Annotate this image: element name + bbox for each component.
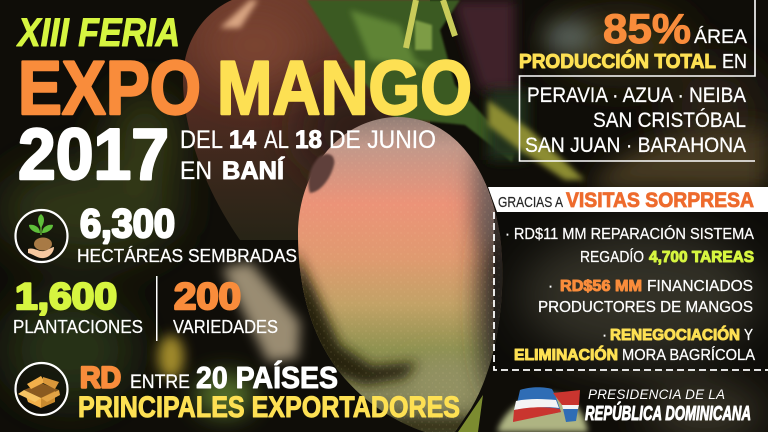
- stat: 200 varieties: VARIEDADES: [173, 317, 278, 337]
- exporter ranking text: 20 PAÍSES: [196, 360, 338, 395]
- exporter ranking text: PRINCIPALES EXPORTADORES: [78, 391, 460, 424]
- panel heading bar: GRACIAS A: [498, 195, 563, 211]
- icon: plant in hand: [16, 210, 68, 262]
- provinces box: [520, 0, 755, 161]
- year: 2017: 2017: [18, 115, 169, 195]
- leaf stems: [406, 0, 416, 48]
- item: irrigation repair: [505, 226, 755, 266]
- dates and location: DEL: [180, 126, 223, 154]
- item: renegotiation: ·: [602, 327, 607, 344]
- item: renegotiation: ELIMINACIÓN: [514, 346, 618, 364]
- panel heading bar: VISITAS SORPRESA: [566, 189, 754, 212]
- stat: 1,600 plantations: [13, 276, 143, 337]
- dark red mango, upper right: [452, 0, 515, 95]
- item: financing: ·: [548, 278, 553, 295]
- exporter ranking text: [78, 360, 460, 424]
- stat: 6,300 hectares: 6,300: [80, 202, 175, 246]
- upper red mango: [180, 0, 440, 240]
- panel heading bar: [488, 187, 768, 212]
- stat: 85% production area: EN: [722, 51, 747, 73]
- item: financing: FINANCIADOS: [647, 278, 753, 295]
- stat: 6,300 hectares: [77, 202, 297, 266]
- item: financing: [538, 278, 753, 316]
- leaf: [307, 0, 515, 162]
- stat: 85% production area: PRODUCCIÓN TOTAL: [519, 49, 716, 73]
- title: Expo Mango: [18, 46, 472, 131]
- dates and location: 14: [229, 126, 256, 154]
- main mango: [298, 117, 502, 432]
- dates and location: DE JUNIO: [329, 126, 436, 154]
- panel: surprise visits: [488, 187, 768, 370]
- icon: Dominican flag: [513, 387, 580, 422]
- stat: 6,300 hectares: HECTÁREAS SEMBRADAS: [77, 246, 297, 266]
- dates and location: EN: [180, 157, 212, 185]
- provinces box: SAN CRISTÓBAL: [593, 109, 746, 132]
- item: financing: PRODUCTORES DE MANGOS: [538, 299, 753, 316]
- item: renegotiation: RENEGOCIACIÓN: [610, 326, 740, 344]
- right blurred scene: [458, 21, 768, 432]
- stat: 85% production area: ÁREA: [694, 25, 747, 48]
- stat: 1,600 plantations: PLANTACIONES: [13, 317, 143, 337]
- logo: Presidencia de la República Dominicana: PRESIDENCIA DE LA: [588, 387, 725, 402]
- item: renegotiation: Y: [744, 327, 753, 344]
- exporter ranking text: RD: [80, 362, 121, 394]
- item: irrigation repair: 4,700 TAREAS: [649, 249, 754, 266]
- stat: 1,600 plantations: 1,600: [15, 276, 117, 317]
- provinces box: SAN JUAN · BARAHONA: [525, 134, 746, 157]
- title: Expo Mango: EXPO: [18, 46, 201, 131]
- title: XIII Feria: XIII FERIA: [16, 11, 180, 55]
- item: renegotiation: MORA BAGRÍCOLA: [622, 347, 756, 364]
- dates and location: BANÍ: [222, 156, 285, 185]
- icon: cardboard box: [16, 363, 68, 415]
- item: irrigation repair: · RD$11 MM REPARACIÓN SISTEMA: [505, 226, 755, 243]
- item: irrigation repair: REGADÍO: [580, 249, 644, 266]
- dates and location: [180, 126, 436, 185]
- stat: 85% production area: [519, 5, 747, 73]
- logo: Presidencia de la República Dominicana: [513, 387, 751, 425]
- exporter ranking text: ENTRE: [130, 372, 190, 393]
- stat: 200 varieties: 200: [174, 276, 241, 317]
- item: financing: RD$56 MM: [560, 278, 642, 295]
- dates and location: AL: [264, 126, 289, 154]
- stat: 85% production area: 85%: [603, 5, 691, 52]
- provinces box: PERAVIA · AZUA · NEIBA: [527, 84, 746, 107]
- dates and location: 18: [295, 126, 322, 154]
- item: renegotiation: [514, 326, 756, 364]
- title: Expo Mango: MANGO: [217, 46, 472, 131]
- stat: 200 varieties: [173, 276, 278, 337]
